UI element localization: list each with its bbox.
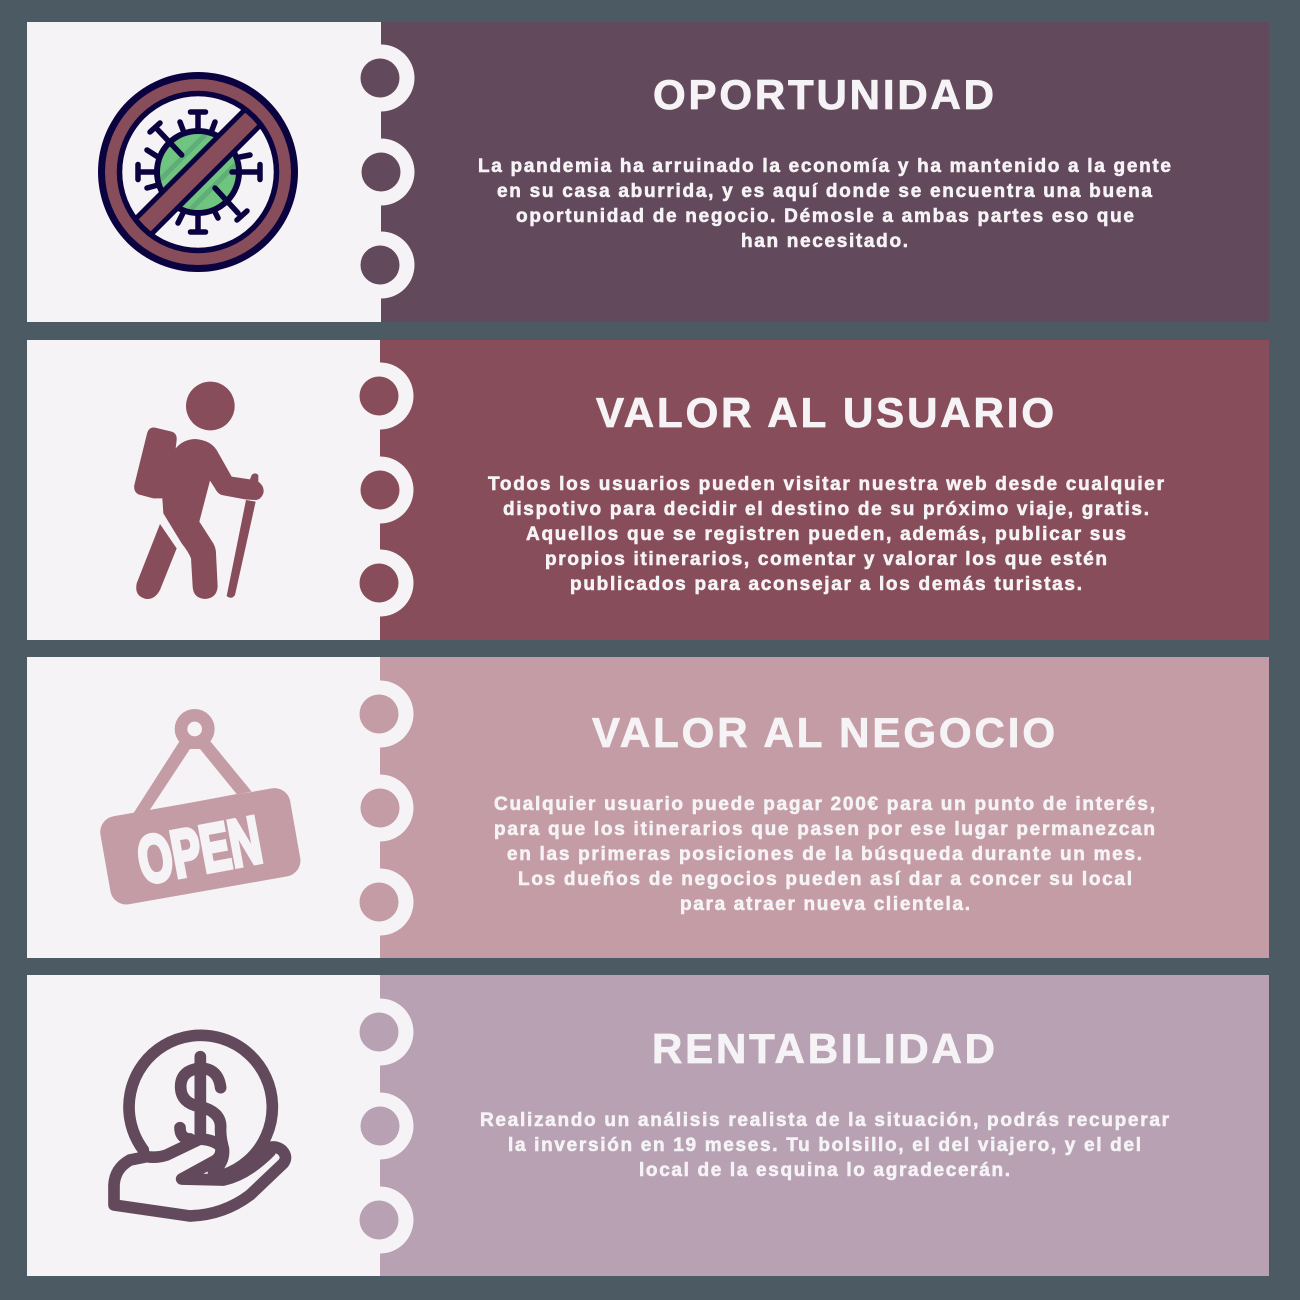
text block: propios itinerarios, comentar y valorar los que estén (545, 549, 1107, 570)
text block: Realizando un análisis realista de la situación, podrás recuperar (480, 1110, 1170, 1131)
panel: oportunidad (27, 22, 1269, 322)
text block: publicados para aconsejar a los demás turistas. (570, 574, 1082, 595)
icon: hand holding coin (114, 1035, 285, 1216)
heading: RENTABILIDAD (652, 1025, 995, 1072)
text block: La pandemia ha arruinado la economía y ha mantenido a la gente (478, 156, 1171, 177)
binder rings (346, 362, 414, 616)
heading: OPORTUNIDAD (653, 71, 994, 118)
text block: oportunidad de negocio. Démosle a ambas partes eso que (516, 206, 1134, 227)
text block: local de la esquina lo agradecerán. (639, 1160, 1010, 1181)
binder rings (348, 44, 414, 298)
text block: han necesitado. (741, 231, 908, 252)
text block (478, 156, 1171, 252)
binder rings (346, 998, 414, 1254)
text block (480, 1110, 1170, 1181)
panel: valor al usuario (27, 340, 1269, 640)
binder rings (346, 680, 414, 936)
text block: Todos los usuarios pueden visitar nuestra web desde cualquier (488, 474, 1165, 495)
text block: Los dueños de negocios pueden así dar a concer su local (518, 869, 1132, 890)
text block: para atraer nueva clientela. (680, 894, 970, 915)
panel: valor al negocio (27, 657, 1269, 958)
text block: dispotivo para decidir el destino de su próximo viaje, gratis. (503, 499, 1149, 520)
icon: hiker (134, 382, 264, 599)
icon: crossed-out virus (98, 72, 298, 272)
text block: en las primeras posiciones de la búsqueda durante un mes. (507, 844, 1142, 865)
icon: open sign (98, 709, 303, 907)
text block: en su casa aburrida, y es aquí donde se encuentra una buena (497, 181, 1152, 202)
heading: VALOR AL NEGOCIO (592, 709, 1055, 756)
text block (494, 794, 1155, 915)
text block: Aquellos que se registren pueden, además, publicar sus (526, 524, 1126, 545)
panel: rentabilidad (27, 975, 1269, 1276)
text block: para que los itinerarios que pasen por ese lugar permanezcan (494, 819, 1155, 840)
heading: VALOR AL USUARIO (596, 389, 1054, 436)
text block (488, 474, 1165, 595)
icon: open sign: OPEN (132, 803, 267, 899)
text block: la inversión en 19 meses. Tu bolsillo, el del viajero, y el del (508, 1135, 1141, 1156)
text block: Cualquier usuario puede pagar 200€ para un punto de interés, (494, 794, 1155, 815)
